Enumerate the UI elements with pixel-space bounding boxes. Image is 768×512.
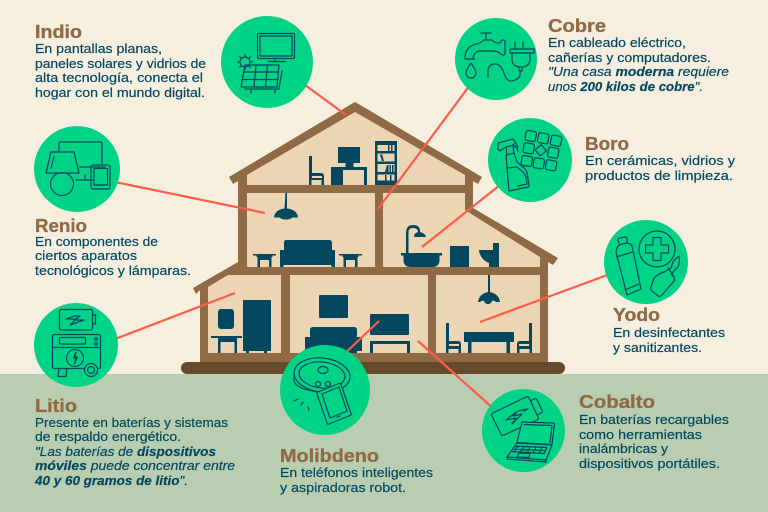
heading: Boro: Boro	[585, 134, 629, 154]
description: Renio: ciertos aparatos	[35, 248, 138, 263]
heading: Molibdeno: Molibdeno	[280, 446, 379, 466]
heading: Indio: Indio	[35, 22, 82, 42]
tv stand	[370, 341, 410, 353]
lounge sofa	[305, 327, 362, 353]
description: Cobre: cañerías y computadores.	[548, 50, 711, 65]
bookshelf	[375, 141, 397, 185]
dining chair left	[446, 323, 461, 353]
description: Indio: En pantallas planas,	[35, 41, 162, 56]
connector line: Yodo	[480, 274, 610, 322]
ceiling lamp upper	[274, 193, 298, 220]
icon: Cobalto battery and laptop	[482, 389, 565, 472]
description: Molibdeno: En teléfonos inteligentes	[280, 465, 434, 480]
connector line: Cobalto	[418, 341, 495, 410]
wall picture	[319, 295, 348, 318]
living sofa	[280, 240, 335, 267]
description: Cobre: En cableado eléctrico,	[548, 35, 686, 50]
connector line: Molibdeno	[340, 321, 379, 358]
description: Litio: de respaldo energético.	[35, 429, 181, 444]
wall mirror	[218, 309, 234, 329]
refrigerator	[243, 300, 271, 353]
connector line: Indio	[305, 85, 346, 115]
house structure	[193, 102, 558, 362]
text block: Cobalto	[579, 392, 730, 471]
heading: Renio: Renio	[35, 216, 87, 236]
heading: Yodo: Yodo	[613, 305, 660, 325]
text block: Boro	[585, 134, 736, 183]
icon: Cobre faucet and plug	[455, 18, 537, 100]
description: Yodo	[613, 325, 726, 355]
heading: Cobalto: Cobalto	[579, 392, 655, 412]
icon: Molibdeno robot vacuum and phone	[280, 345, 370, 435]
ceiling lamp lower	[478, 275, 500, 304]
attic chair	[309, 156, 324, 185]
bathtub and shower	[401, 225, 442, 267]
house foundation	[181, 362, 565, 374]
heading: Litio: Litio	[35, 396, 77, 416]
icon: Litio battery and generator	[34, 303, 118, 387]
description: Cobalto	[579, 412, 730, 471]
description: Indio: paneles solares y vidrios de	[35, 56, 206, 71]
text block: Molibdeno	[280, 446, 434, 495]
description: Cobalto: En baterías recargables	[579, 412, 730, 427]
connector line: Cobre	[378, 85, 470, 209]
television	[370, 314, 409, 335]
description: Molibdeno	[280, 465, 434, 495]
description: Litio: 40 y 60 gramos de litio ".	[34, 473, 188, 488]
description: Boro	[585, 153, 736, 183]
description: Litio: móviles puede concentrar entre	[35, 458, 235, 473]
description: Renio: En componentes de	[35, 234, 158, 249]
side table right	[339, 254, 362, 267]
background: green ground	[0, 374, 768, 512]
icon: Indio monitor and solar panel	[221, 16, 313, 108]
console table	[211, 336, 242, 353]
description: Indio: hogar con el mundo digital.	[35, 85, 205, 100]
text block: Cobre	[548, 16, 729, 94]
text block: Indio	[35, 22, 206, 100]
house	[181, 102, 565, 374]
text block: Renio	[35, 216, 191, 278]
description: Cobre	[548, 35, 729, 94]
description: Cobalto: dispositivos portátiles.	[579, 456, 720, 471]
bathroom cabinet	[450, 246, 469, 267]
books	[380, 145, 394, 181]
description: Renio: tecnológicos y lámparas.	[35, 263, 191, 278]
description: Litio: Presente en baterías y sistemas	[35, 415, 229, 430]
dining chair right	[517, 323, 532, 353]
dining table	[464, 332, 514, 353]
description: Litio	[34, 415, 235, 488]
background: cream sky	[0, 0, 768, 374]
heading: Cobre: Cobre	[548, 16, 606, 36]
description: Yodo: En desinfectantes	[613, 325, 726, 340]
connector line: Renio	[115, 182, 265, 213]
description: Cobalto: inalámbricas y	[579, 441, 669, 456]
description: Cobalto: como herramientas	[579, 427, 703, 442]
text block: Litio	[34, 396, 235, 488]
icon: Yodo bottles and cross	[604, 220, 688, 304]
description: Molibdeno: y aspiradoras robot.	[280, 480, 406, 495]
description: Indio: alta tecnología, conecta el	[35, 70, 203, 85]
icon: Boro spray bottle and tiles	[488, 118, 572, 202]
connector line: Litio	[115, 293, 235, 339]
text block: Yodo	[613, 305, 726, 355]
connector line: Boro	[422, 185, 500, 247]
description: Cobre: unos 200 kilos de cobre".	[548, 79, 703, 94]
attic desk and monitor	[331, 147, 367, 185]
description: Boro: En cerámicas, vidrios y	[585, 153, 736, 168]
toilet	[479, 243, 499, 267]
description: Litio: "Las baterías de dispositivos	[35, 444, 216, 459]
description: Indio	[35, 41, 206, 100]
side table left	[253, 254, 276, 267]
description: Cobre: "Una casa moderna requiere	[548, 64, 729, 79]
description: Renio	[35, 234, 191, 278]
icon: Renio lamp, monitor and tablet	[34, 126, 120, 212]
description: Yodo: y sanitizantes.	[613, 340, 702, 355]
description: Boro: productos de limpieza.	[585, 168, 733, 183]
